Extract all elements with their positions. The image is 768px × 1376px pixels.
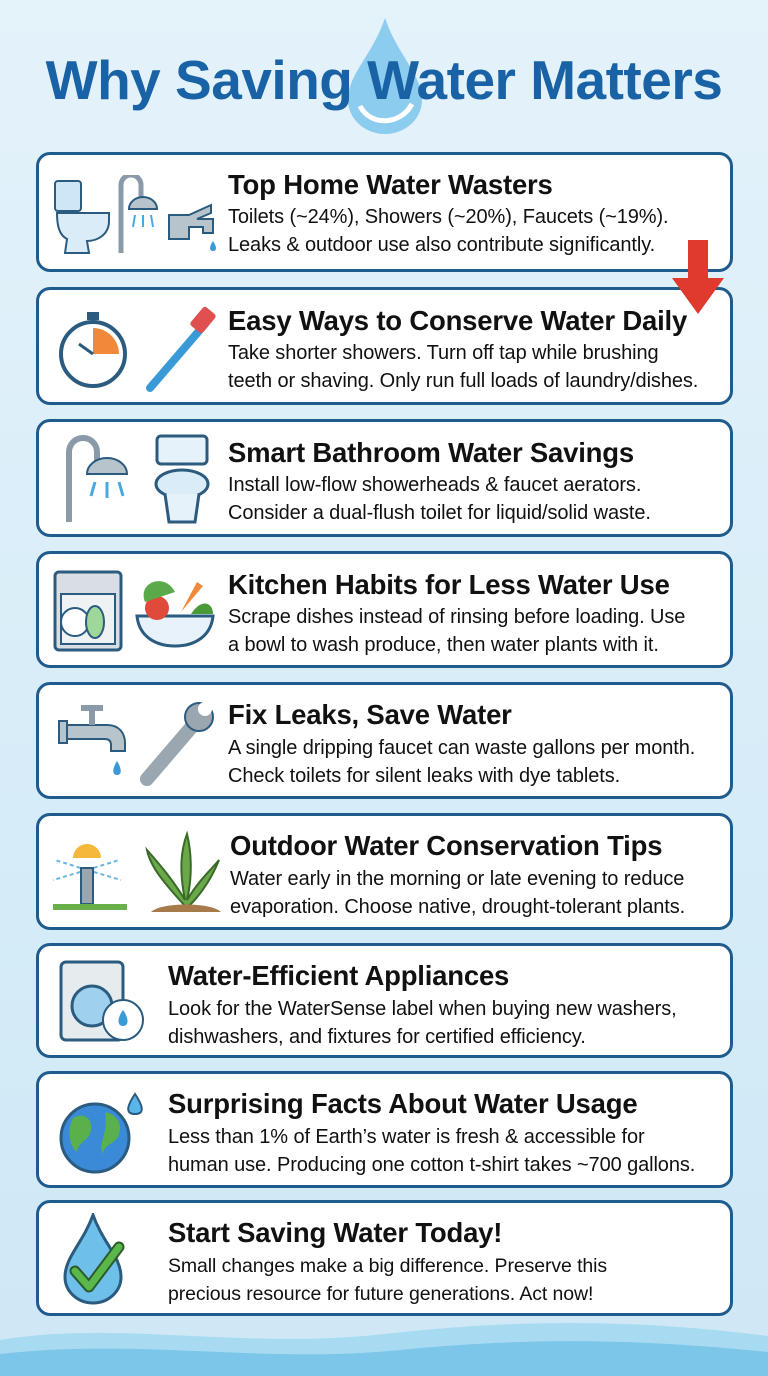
body text: dishwashers, and fixtures for certified efficiency. [168, 1026, 586, 1048]
icon: toilet shower faucet [54, 175, 216, 254]
body text [228, 606, 685, 656]
body text: Check toilets for silent leaks with dye tablets. [228, 765, 620, 787]
body text: evaporation. Choose native, drought-tolerant plants. [230, 896, 685, 918]
body text: Small changes make a big difference. Preserve this [168, 1255, 607, 1277]
body text [168, 1126, 695, 1176]
panel: kitchen [36, 551, 733, 668]
body text: Water early in the morning or late evening to reduce [230, 868, 684, 890]
icon: drop with checkmark [64, 1213, 124, 1304]
heading: Kitchen Habits for Less Water Use [228, 569, 670, 600]
arrow: red down [672, 240, 724, 314]
panel: top home water wasters [36, 152, 733, 272]
icon: faucet and wrench [58, 702, 214, 786]
body text: teeth or shaving. Only run full loads of laundry/dishes. [228, 370, 698, 392]
icon: stopwatch and toothbrush [59, 306, 216, 392]
icon: globe and drop [60, 1092, 143, 1174]
heading: Surprising Facts About Water Usage [168, 1088, 637, 1119]
heading: Start Saving Water Today! [168, 1217, 502, 1248]
title drop decoration [348, 18, 422, 134]
heading: Easy Ways to Conserve Water Daily [228, 305, 687, 336]
heading: Fix Leaks, Save Water [228, 699, 512, 730]
body text: human use. Producing one cotton t-shirt takes ~700 gallons. [168, 1154, 695, 1176]
icon: sprinkler and plant [52, 830, 221, 912]
body text: Consider a dual-flush toilet for liquid/solid waste. [228, 502, 651, 524]
body text: Install low-flow showerheads & faucet aerators. [228, 474, 641, 496]
panel: bathroom [36, 419, 733, 537]
body text: precious resource for future generations. Act now! [168, 1283, 593, 1305]
body text: Less than 1% of Earth’s water is fresh & accessible for [168, 1126, 645, 1148]
body text [228, 474, 651, 524]
body text: Leaks & outdoor use also contribute significantly. [228, 234, 655, 256]
body text [228, 342, 698, 392]
panel: surprising facts [36, 1071, 733, 1188]
body text: Scrape dishes instead of rinsing before loading. Use [228, 606, 685, 628]
icon: dishwasher and vegetable bowl [54, 570, 215, 652]
body text [168, 1255, 607, 1305]
panel: appliances [36, 943, 733, 1058]
heading: Outdoor Water Conservation Tips [230, 830, 662, 861]
body text [228, 206, 668, 256]
body text [168, 998, 677, 1048]
body text: a bowl to wash produce, then water plants with it. [228, 634, 659, 656]
body text: Take shorter showers. Turn off tap while brushing [228, 342, 659, 364]
bottom waves [0, 1323, 768, 1376]
body text [230, 868, 685, 918]
heading: Smart Bathroom Water Savings [228, 437, 634, 468]
heading: Water-Efficient Appliances [168, 960, 509, 991]
body text: A single dripping faucet can waste gallons per month. [228, 737, 695, 759]
panel: fix leaks [36, 682, 733, 799]
body text [228, 737, 695, 787]
body text: Toilets (~24%), Showers (~20%), Faucets (~19%). [228, 206, 668, 228]
title: Why Saving Water Matters [46, 49, 722, 111]
panel: outdoor [36, 813, 733, 930]
icon: showerhead and toilet [66, 434, 210, 524]
body text: Look for the WaterSense label when buying new washers, [168, 998, 677, 1020]
icon: washer with WaterSense badge [60, 960, 144, 1042]
heading: Top Home Water Wasters [228, 169, 553, 200]
panel: start saving [36, 1200, 733, 1316]
panel: easy ways [36, 287, 733, 405]
